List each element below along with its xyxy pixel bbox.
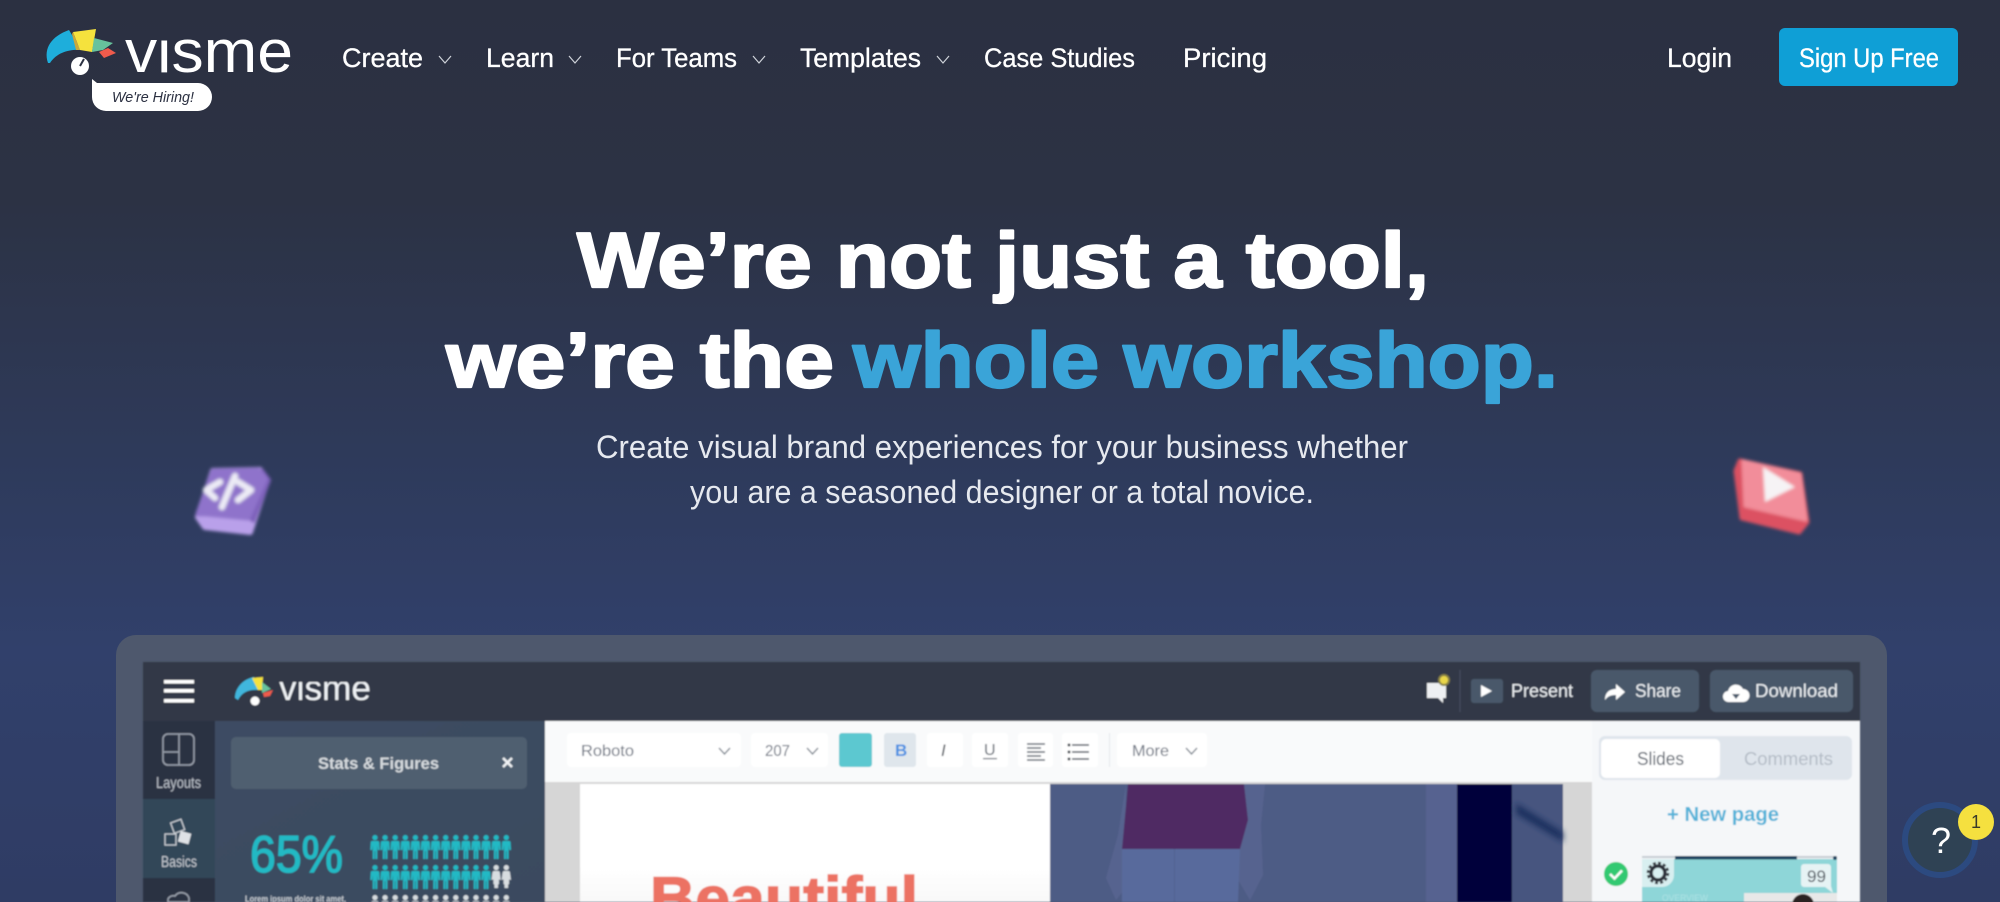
share button [1591, 670, 1699, 712]
bold button: B [895, 741, 907, 760]
notification badge: 1 [1971, 812, 1981, 832]
slides tabs: Comments [1744, 749, 1833, 769]
hero heading: we’re the [445, 316, 834, 404]
font selector: Roboto [581, 743, 634, 760]
app screen [143, 662, 1860, 902]
share button: Share [1635, 681, 1681, 701]
hero heading [445, 216, 1558, 404]
underline button [972, 733, 1008, 767]
slides tabs: Slides [1637, 749, 1684, 769]
slide thumbnail [1642, 856, 1837, 902]
icon: hamburger menu [164, 680, 194, 702]
navigation bar [46, 28, 1958, 111]
hero subtitle [596, 429, 1408, 510]
app mockup: laptop frame [116, 635, 1887, 902]
bold button [884, 733, 916, 767]
sign up button: Sign Up Free [1799, 43, 1939, 73]
pictogram: people [370, 835, 511, 902]
sign up button [1779, 28, 1958, 86]
italic button: I [941, 741, 946, 760]
hero subtitle: Create visual brand experiences for your business whether [596, 429, 1408, 465]
download button: Download [1755, 681, 1838, 701]
text toolbar [545, 721, 1592, 782]
icon: red play key [1736, 461, 1807, 532]
left icon sidebar [143, 721, 215, 902]
font selector [567, 733, 741, 767]
align button [1018, 733, 1053, 767]
present button [1471, 679, 1573, 703]
icon: comments with notification [1427, 675, 1449, 703]
sidebar: layouts: Layouts [156, 775, 201, 792]
sidebar: basics [143, 799, 215, 878]
nav item: Login: Login [1667, 43, 1732, 73]
more menu [1117, 733, 1207, 767]
more menu: More [1132, 743, 1169, 760]
stat: 65 percent: 65% [250, 826, 343, 884]
nav item: Create: Create [342, 43, 423, 73]
hero heading: whole workshop. [852, 316, 1558, 404]
new page link: + New page [1667, 804, 1779, 826]
app logo: visme [279, 669, 371, 708]
nav item: Case Studies: Case Studies [984, 43, 1135, 73]
stats and figures panel [215, 721, 545, 902]
icon: gear [1648, 863, 1668, 883]
comment count badge: 99 [1807, 867, 1826, 886]
editor slide: photo side [1050, 784, 1563, 902]
nav item: For Teams: For Teams [616, 43, 737, 73]
nav item: Templates: Templates [800, 43, 921, 73]
hero subtitle: you are a seasoned designer or a total novice. [690, 474, 1314, 510]
download button [1710, 670, 1853, 712]
present button: Present [1511, 681, 1573, 701]
size selector: 207 [765, 743, 790, 760]
list button [1062, 733, 1098, 767]
visme logo [46, 29, 290, 111]
sidebar: next item icon [168, 893, 189, 902]
nav item: Pricing: Pricing [1183, 43, 1267, 73]
underline button: U [984, 742, 996, 759]
size selector [751, 733, 828, 767]
panel header [231, 737, 527, 789]
slides panel [1592, 721, 1860, 902]
sidebar: layouts [156, 734, 201, 792]
sidebar: basics: Basics [161, 854, 197, 871]
slide check badge [1604, 862, 1628, 886]
nav item: Learn: Learn [486, 43, 554, 73]
panel header: Stats & Figures [318, 754, 439, 773]
help widget [1905, 804, 1994, 875]
canvas background [545, 782, 1592, 902]
icon: purple code key [198, 469, 270, 532]
logo mark [47, 29, 116, 75]
editor slide: text side [580, 784, 1050, 902]
hiring speech bubble [92, 79, 212, 111]
logo wordmark: visme [125, 18, 293, 85]
colour swatch [839, 733, 872, 767]
help button: ? [1931, 820, 1951, 861]
photo: person [1106, 784, 1265, 902]
italic button [927, 733, 963, 767]
slides tabs [1599, 736, 1852, 780]
comment count badge [1801, 864, 1833, 893]
thumbnail photo [1744, 893, 1837, 902]
app logo [234, 676, 371, 707]
hiring speech bubble: We're Hiring! [112, 89, 195, 106]
hero heading: We’re not just a tool, [577, 216, 1429, 304]
app top bar [164, 669, 1853, 712]
